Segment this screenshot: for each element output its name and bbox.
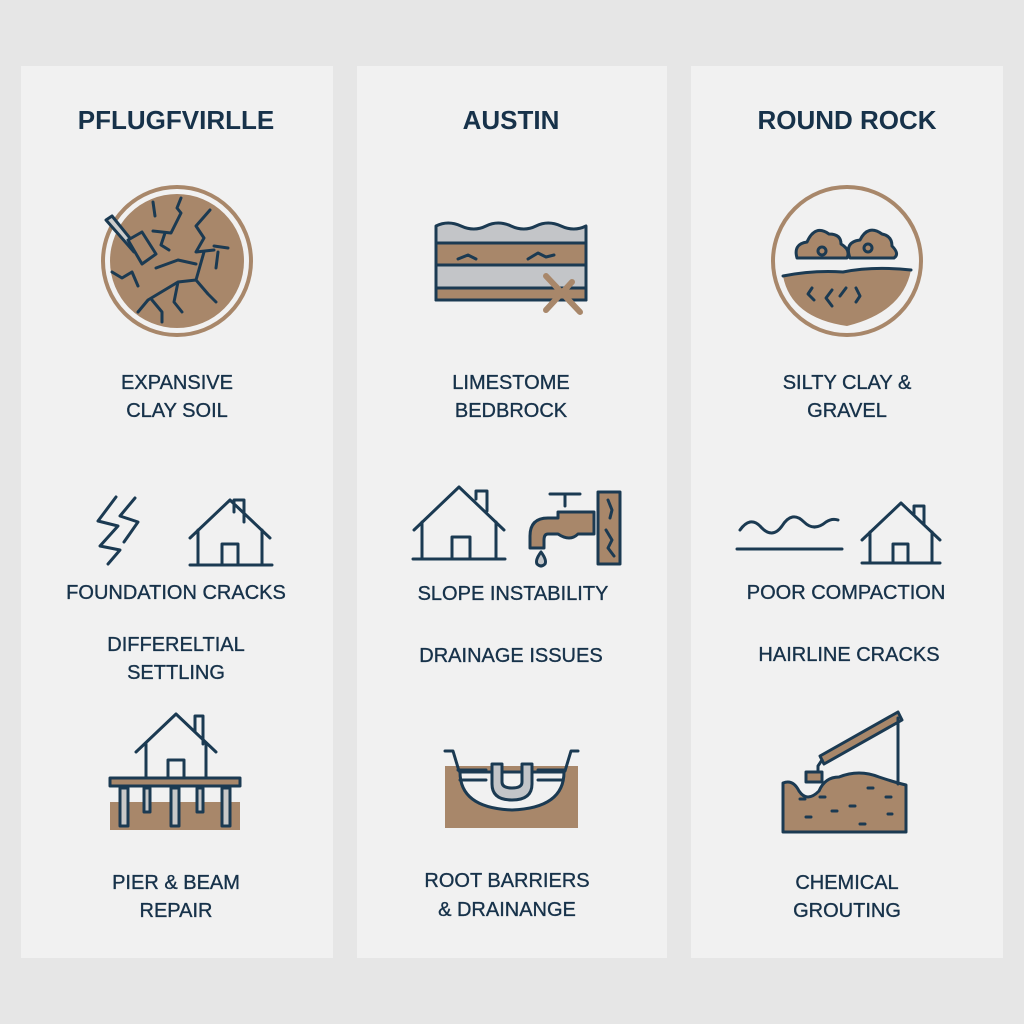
icon: lightning cracks (98, 497, 138, 564)
title: Austin: AUSTIN (463, 105, 559, 135)
panel: Pflugerville (21, 66, 333, 958)
icon: house (190, 500, 272, 565)
icon: house (413, 487, 505, 559)
panel: Austin: & DRAINANGE (438, 899, 576, 921)
label: slope instability: SLOPE INSTABILITY (418, 583, 608, 605)
panel: Austin: BEDBROCK (455, 400, 568, 422)
icon: limestone bedrock strata (436, 223, 586, 312)
icon: pier and beam house (110, 714, 240, 830)
panel: Austin (357, 66, 667, 958)
label: silty clay and gravel: SILTY CLAY & (783, 372, 912, 394)
title: Pflugfvirlle: PFLUGFVIRLLE (78, 105, 274, 135)
panel: Pflugerville: SETTLING (127, 662, 225, 684)
icon: wave (737, 517, 842, 549)
icon: chemical grouting rig (783, 712, 906, 832)
label: root barriers and drainage: ROOT BARRIERS (424, 870, 590, 892)
label: expansive clay soil: EXPANSIVE (121, 372, 233, 394)
label: poor compaction: POOR COMPACTION (747, 582, 945, 604)
label: foundation cracks: FOUNDATION CRACKS (66, 582, 286, 604)
label: limestone bedrock: LIMESTOME (452, 372, 570, 394)
panel: Pflugerville: REPAIR (140, 900, 212, 922)
panel: Pflugerville: CLAY SOIL (126, 400, 228, 422)
icon: house (862, 503, 940, 563)
panel: Round Rock (691, 66, 1003, 958)
label: chemical grouting: CHEMICAL (795, 872, 899, 894)
label: hairline cracks: HAIRLINE CRACKS (758, 644, 940, 666)
label: drainage issues: DRAINAGE ISSUES (419, 645, 603, 667)
label: pier and beam repair: PIER & BEAM (112, 872, 240, 894)
panel: Round Rock: GROUTING (793, 900, 901, 922)
title: Round Rock: ROUND ROCK (757, 105, 937, 135)
panel: Round Rock: GRAVEL (807, 400, 887, 422)
icon: cracked clay soil circle (103, 187, 251, 335)
icon: root barrier trench (445, 751, 578, 828)
label: differential settling: DIFFERELTIAL (107, 634, 245, 656)
icon: leaking faucet and cracked wall (530, 492, 620, 566)
icon: silty clay and gravel circle (773, 187, 921, 335)
